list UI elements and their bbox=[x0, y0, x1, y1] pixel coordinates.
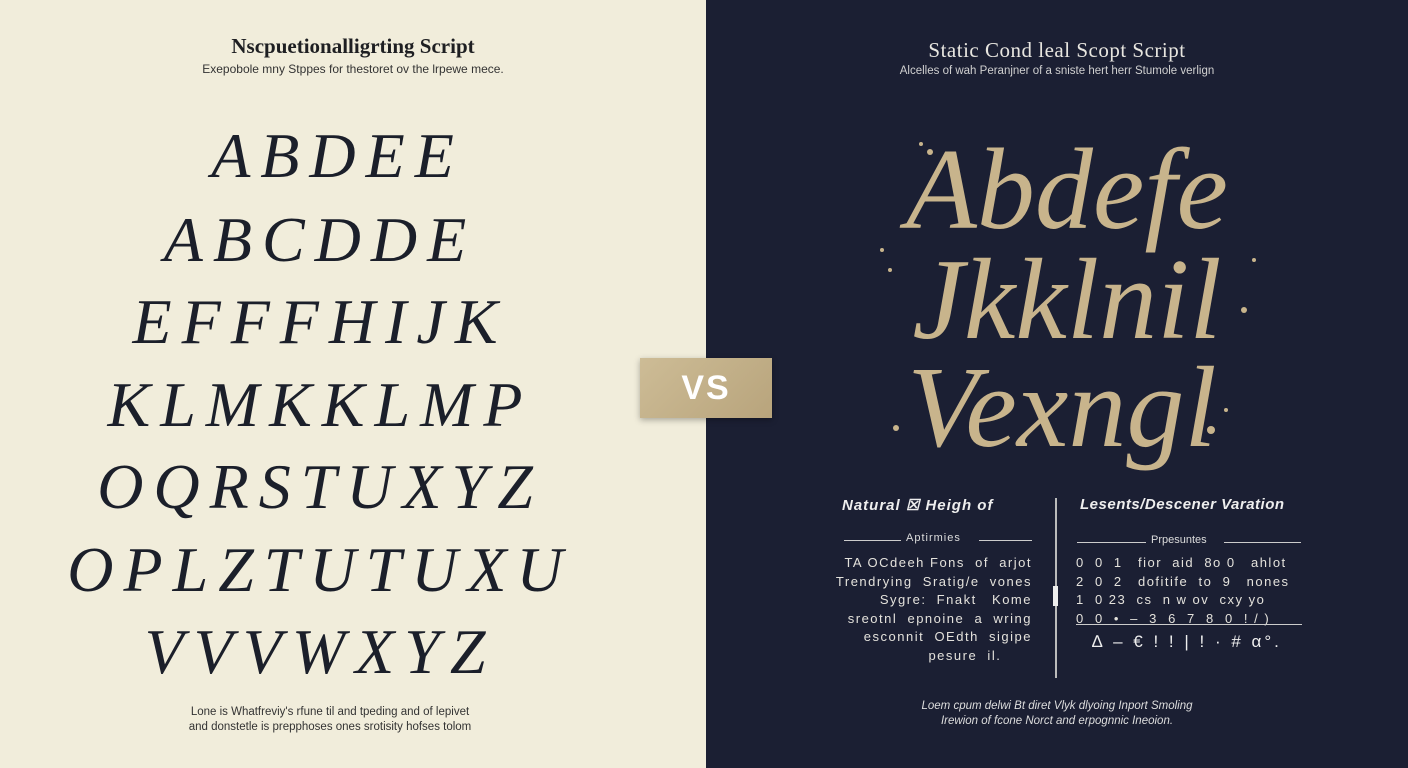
right column: descender variation: 0 0 1 fior aid 8o 0 ahlot 2 0 2 dofitife to 9 nones 1 0 23 cs n w ov cxy yo 0 0 • – 3 6 7 8 0 ! / ) bbox=[1076, 555, 1290, 626]
left column: natural height: TA OCdeeh Fons of arjot Trendrying Sratig/e vones Sygre: Fnakt Kome sreotnl epnoine a wring esconnit OEdth sigipe pesure il. bbox=[836, 555, 1032, 662]
vertical divider bbox=[1055, 498, 1057, 678]
left column: natural height: Natural ☒ Heigh of bbox=[842, 497, 993, 514]
alphabet grid: OQRSTUXYZ bbox=[97, 451, 543, 522]
VS badge: VS bbox=[681, 369, 731, 407]
script showcase: Jkklnil bbox=[912, 236, 1222, 364]
right subtitle: Alcelles of wah Peranjner of a sniste hert herr Stumole verlign bbox=[900, 65, 1214, 77]
script showcase: Vexngl bbox=[907, 344, 1217, 472]
alphabet grid bbox=[67, 120, 573, 687]
alphabet grid: OPLZTUTUXU bbox=[67, 534, 573, 605]
right column: descender variation: Lesents/Descener Varation bbox=[1080, 496, 1285, 513]
panel: left cream bbox=[0, 0, 706, 768]
alphabet grid: ABDEE bbox=[211, 120, 464, 191]
left subtitle: Exepobole mny Stppes for thestoret ov the lrpewe mece. bbox=[202, 62, 504, 76]
alphabet grid: EFFFHIJK bbox=[132, 286, 508, 357]
VS badge bbox=[640, 358, 772, 418]
left column: natural height bbox=[836, 497, 1032, 662]
alphabet grid: KLMKKLMP bbox=[108, 369, 532, 440]
panel: right dark bbox=[706, 0, 1408, 768]
right column: descender variation: ∆ – € ! ! | ! · # α°. bbox=[1092, 632, 1282, 651]
left footer text: and donstetle is prepphoses ones srotisity hofses tolom bbox=[189, 721, 471, 733]
right footer text: Loem cpum delwi Bt diret Vlyk dlyoing Inport Smoling bbox=[921, 700, 1192, 712]
left footer text bbox=[189, 706, 471, 733]
script showcase bbox=[880, 126, 1256, 472]
right column: descender variation: Prpesuntes bbox=[1151, 534, 1207, 546]
left column: natural height: Aptirmies bbox=[906, 532, 961, 544]
alphabet grid: VVVWXYZ bbox=[145, 616, 495, 687]
script showcase: Abdefe bbox=[906, 126, 1228, 254]
right title: Static Cond leal Scopt Script bbox=[928, 38, 1186, 62]
right column: descender variation bbox=[1076, 496, 1302, 651]
right footer text bbox=[921, 700, 1192, 727]
right footer text: Irewion of fcone Norct and erpognnic Ineoion. bbox=[941, 715, 1173, 727]
left footer text: Lone is Whatfreviy's rfune til and tpeding and of lepivet bbox=[191, 706, 469, 718]
alphabet grid: ABCDDE bbox=[164, 204, 476, 275]
left title: Nscpuetionalligrting Script bbox=[231, 34, 475, 58]
